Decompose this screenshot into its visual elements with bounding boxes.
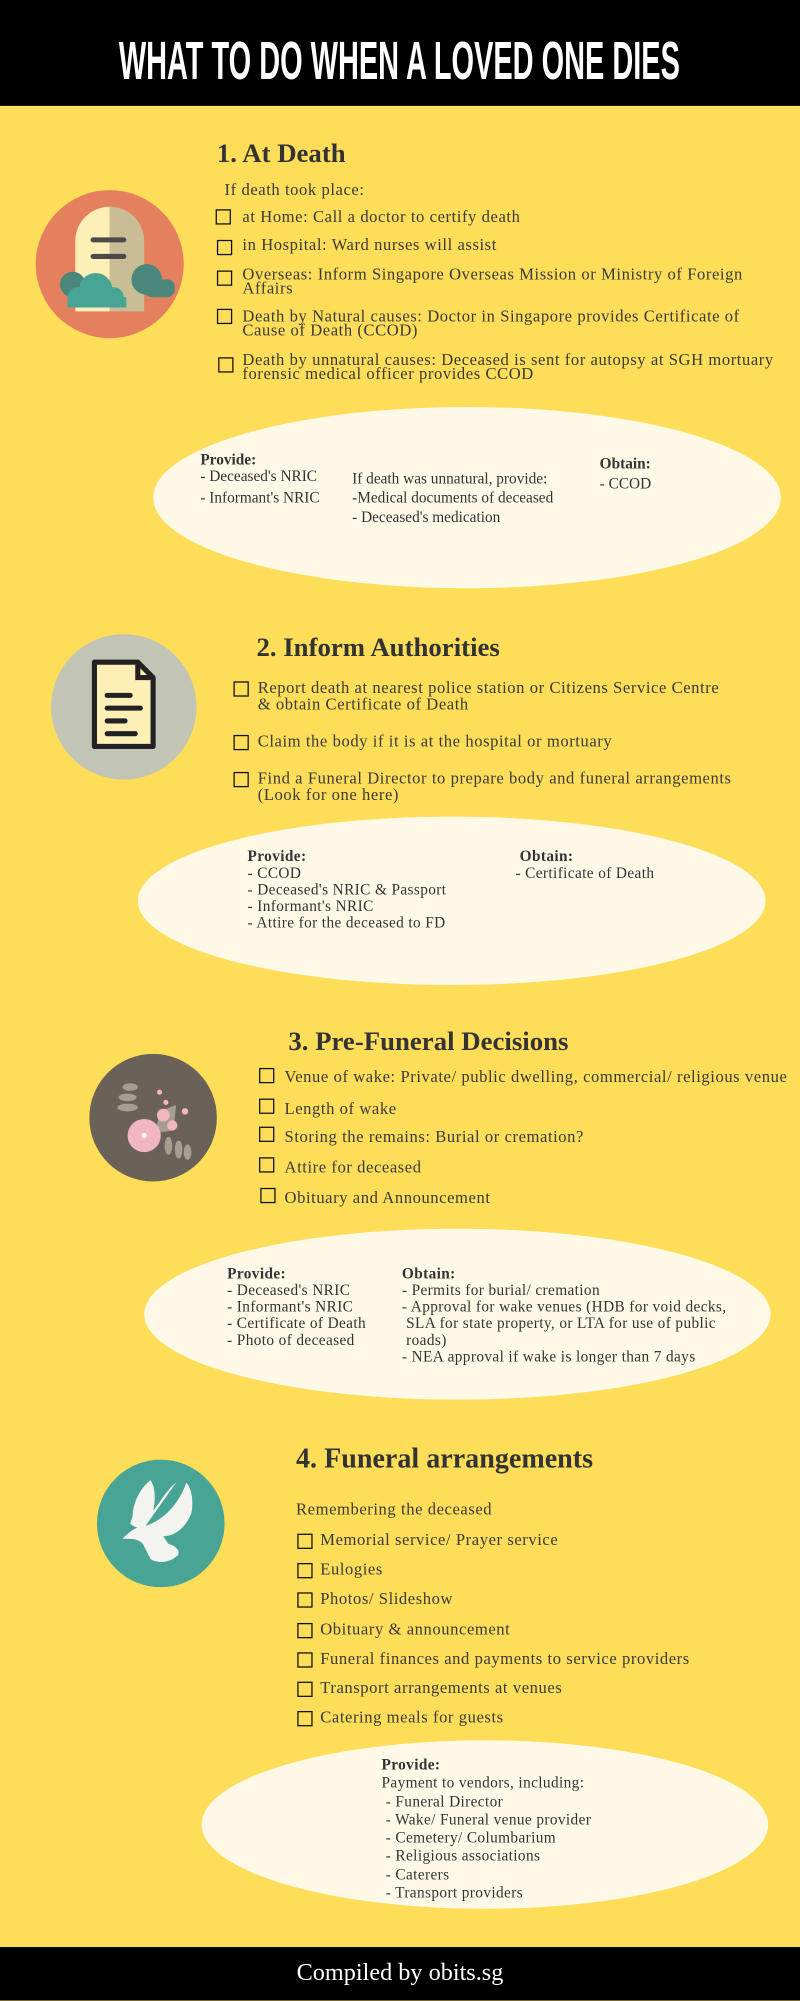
- section 4 list: Funeral finances and payments to service providers: [320, 1648, 690, 1668]
- callout 4: - Transport providers: [386, 1883, 523, 1901]
- section 1 list: If death took place:: [225, 180, 365, 199]
- section 1 list: at Home: Call a doctor to certify death: [242, 207, 520, 226]
- callout 1: [153, 407, 781, 588]
- callout 4: - Cemetery/ Columbarium: [386, 1829, 556, 1846]
- section 3 list: [259, 1067, 787, 1207]
- section 2 list: & obtain Certificate of Death: [258, 694, 469, 713]
- section 3 list: Length of wake: [285, 1099, 397, 1118]
- callout 3: - Photo of deceased: [227, 1331, 355, 1349]
- footer text: Compiled by obits.sg: [297, 1960, 503, 1987]
- callout 1: Provide:: [200, 450, 256, 468]
- callout 4: - Wake/ Funeral venue provider: [386, 1810, 591, 1828]
- section 1 list: forensic medical officer provides CCOD: [242, 364, 534, 383]
- header bar: [0, 0, 800, 106]
- section 4 list: Catering meals for guests: [320, 1707, 504, 1726]
- icon: dove: [97, 1460, 224, 1588]
- heading 4: 4. Funeral arrangements: [296, 1442, 593, 1474]
- section 4 list: Eulogies: [320, 1559, 383, 1578]
- callout 3: roads): [406, 1331, 447, 1349]
- section 4 list: Memorial service/ Prayer service: [320, 1530, 558, 1549]
- callout 4: - Religious associations: [386, 1847, 540, 1865]
- section 1 list: Death by unnatural causes: Deceased is sent for autopsy at SGH mortuary: [242, 350, 774, 369]
- callout 1: - CCOD: [600, 475, 651, 493]
- icon: gravestone: [36, 190, 184, 338]
- callout 2: [138, 817, 766, 985]
- section 4 list: Transport arrangements at venues: [320, 1678, 562, 1697]
- callout 2: - Attire for the deceased to FD: [248, 914, 446, 931]
- section 4 list: Photos/ Slideshow: [320, 1589, 453, 1608]
- section 1 list: [216, 180, 774, 383]
- callout 2: - Informant's NRIC: [248, 897, 374, 915]
- icon: document: [51, 634, 196, 780]
- section 1 list: Cause of Death (CCOD): [242, 320, 418, 339]
- icon: flowers: [89, 1054, 217, 1182]
- section 2 list: Report death at nearest police station or Citizens Service Centre: [258, 678, 719, 697]
- callout 2: Provide:: [248, 847, 306, 865]
- callout 4: [202, 1740, 768, 1909]
- callout 3: Obtain:: [402, 1264, 456, 1282]
- section 1 list: Overseas: Inform Singapore Overseas Mission or Ministry of Foreign: [242, 264, 743, 283]
- callout 2: - Certificate of Death: [515, 864, 654, 882]
- callout 3: SLA for state property, or LTA for use of public: [406, 1314, 716, 1332]
- section 4 list: Obituary & announcement: [320, 1619, 510, 1638]
- section 3 list: Storing the remains: Burial or cremation?: [285, 1127, 584, 1146]
- callout 3: - NEA approval if wake is longer than 7 days: [402, 1347, 696, 1365]
- callout 3: - Informant's NRIC: [227, 1298, 353, 1315]
- callout 4: - Funeral Director: [386, 1792, 503, 1810]
- section 4 list: [296, 1499, 690, 1726]
- section 2 list: (Look for one here): [258, 785, 399, 804]
- section 4 list: Remembering the deceased: [296, 1499, 492, 1518]
- heading 3: 3. Pre-Funeral Decisions: [288, 1026, 568, 1056]
- section 1 list: in Hospital: Ward nurses will assist: [242, 235, 497, 254]
- callout 3: - Certificate of Death: [227, 1314, 366, 1332]
- callout 3: - Approval for wake venues (HDB for void decks,: [402, 1298, 726, 1315]
- callout 2: - Deceased's NRIC & Passport: [248, 880, 446, 898]
- callout 2: - CCOD: [248, 864, 301, 882]
- heading 2: 2. Inform Authorities: [256, 632, 500, 662]
- footer: [0, 1947, 800, 2001]
- callout 1: Obtain:: [600, 454, 651, 472]
- callout 3: - Permits for burial/ cremation: [402, 1281, 600, 1299]
- callout 4: - Caterers: [386, 1865, 449, 1883]
- section 1 list: Affairs: [242, 278, 293, 297]
- callout 3: - Deceased's NRIC: [227, 1281, 350, 1299]
- section 2 list: Find a Funeral Director to prepare body and funeral arrangements: [258, 768, 732, 787]
- callout 2: Obtain:: [520, 847, 573, 865]
- callout 1: - Informant's NRIC: [200, 489, 320, 507]
- title: WHAT TO DO WHEN A LOVED ONE DIES: [119, 31, 680, 91]
- callout 4: Provide:: [382, 1756, 440, 1774]
- callout 1: - Deceased's medication: [352, 508, 500, 526]
- callout 1: If death was unnatural, provide:: [352, 470, 547, 487]
- section 3 list: Attire for deceased: [285, 1157, 422, 1176]
- callout 1: -Medical documents of deceased: [352, 489, 553, 507]
- heading 1: 1. At Death: [217, 138, 346, 168]
- section 2 list: Claim the body if it is at the hospital or mortuary: [258, 731, 612, 750]
- callout 1: - Deceased's NRIC: [200, 467, 317, 485]
- section 2 list: [234, 678, 732, 804]
- section 3 list: Venue of wake: Private/ public dwelling, commercial/ religious venue: [285, 1067, 787, 1086]
- callout 3: [144, 1229, 771, 1400]
- section 3 list: Obituary and Announcement: [285, 1188, 491, 1207]
- callout 4: Payment to vendors, including:: [382, 1774, 584, 1792]
- callout 3: Provide:: [227, 1264, 286, 1282]
- section 1 list: Death by Natural causes: Doctor in Singapore provides Certificate of: [242, 306, 740, 325]
